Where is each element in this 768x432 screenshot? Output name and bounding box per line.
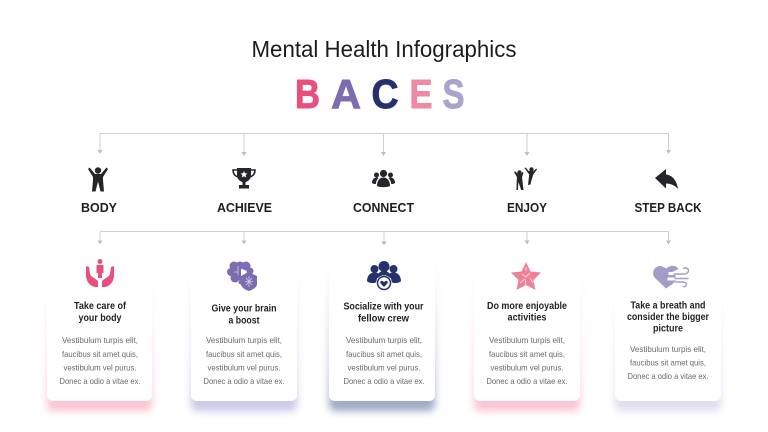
body text: faucibus sit amet quis, (630, 358, 706, 368)
icon: star (511, 262, 541, 290)
body text (60, 335, 140, 386)
heading: take care: Take care of (74, 301, 127, 312)
body text: faucibus sit amet quis, (62, 349, 138, 359)
body text (204, 335, 284, 386)
label: body: BODY (81, 200, 117, 215)
icon: hands holding person (86, 259, 114, 287)
body text: Donec a odio a vitae ex. (486, 376, 568, 386)
label: step back: STEP BACK (634, 200, 702, 215)
BACES acronym (295, 71, 464, 117)
body text: vestibulum vel purus. (64, 362, 136, 372)
panel: connect card (329, 248, 435, 411)
body text: Vestibulum turpis elit, (489, 335, 565, 345)
label: connect: CONNECT (353, 200, 414, 215)
panel: enjoy card (474, 248, 580, 411)
icon: body (88, 167, 108, 192)
heading: brain boost: Give your brain (212, 304, 277, 314)
icon: connect people (372, 170, 395, 187)
heading: breath: Take a breath and (630, 300, 706, 312)
body text: Vestibulum turpis elit, (630, 344, 706, 354)
icon: heart with wind (653, 266, 688, 288)
body text: vestibulum vel purus. (490, 362, 564, 372)
body text: vestibulum vel purus. (348, 362, 420, 372)
BACES acronym: E (410, 71, 432, 117)
body text: faucibus sit amet quis, (489, 349, 565, 359)
BACES acronym: B (295, 71, 320, 117)
heading: enjoyable (487, 301, 567, 324)
BACES acronym: S (442, 71, 464, 117)
body text (344, 335, 424, 386)
body text: vestibulum vel purus. (208, 362, 280, 372)
body text: Vestibulum turpis elit, (346, 335, 422, 345)
icon: brain (227, 262, 257, 291)
label: achieve: ACHIEVE (217, 200, 272, 215)
heading: socialize: Socialize with your (344, 302, 424, 312)
heading: socialize: fellow crew (358, 314, 409, 324)
icon: step back arrow (655, 169, 678, 189)
icon: achieve trophy (233, 168, 255, 188)
icon: crew with heart (367, 261, 401, 291)
body text (486, 335, 568, 386)
body text: faucibus sit amet quis, (206, 349, 282, 359)
heading: breath: consider the bigger (627, 312, 709, 323)
heading: breath (627, 300, 709, 334)
heading: breath: picture (653, 324, 683, 334)
heading: brain boost: a boost (228, 316, 260, 326)
heading: take care: your body (78, 313, 122, 324)
title: Mental Health Infographics (252, 36, 516, 62)
body text: Donec a odio a vitae ex. (628, 371, 708, 381)
body text: Vestibulum turpis elit, (62, 335, 138, 345)
label: enjoy: ENJOY (507, 200, 547, 215)
body text (628, 344, 708, 381)
body text: Donec a odio a vitae ex. (60, 376, 140, 386)
body text: Vestibulum turpis elit, (206, 335, 282, 345)
panel: achieve card (191, 248, 297, 411)
panel: body card (47, 248, 152, 411)
heading: enjoyable: Do more enjoyable (487, 301, 567, 312)
BACES acronym: A (331, 71, 361, 117)
heading: enjoyable: activities (508, 312, 547, 324)
icon: enjoy jumping figures (514, 167, 537, 190)
body text: Donec a odio a vitae ex. (344, 376, 424, 386)
heading: take care (74, 301, 127, 324)
heading: socialize (344, 302, 424, 324)
body text: Donec a odio a vitae ex. (204, 376, 284, 386)
lower connector with arrows (98, 232, 671, 246)
panel: step back card (615, 248, 721, 411)
body text: faucibus sit amet quis, (346, 349, 422, 359)
BACES acronym: C (372, 71, 398, 117)
heading: brain boost (212, 304, 277, 326)
top connector with arrows (98, 134, 671, 156)
